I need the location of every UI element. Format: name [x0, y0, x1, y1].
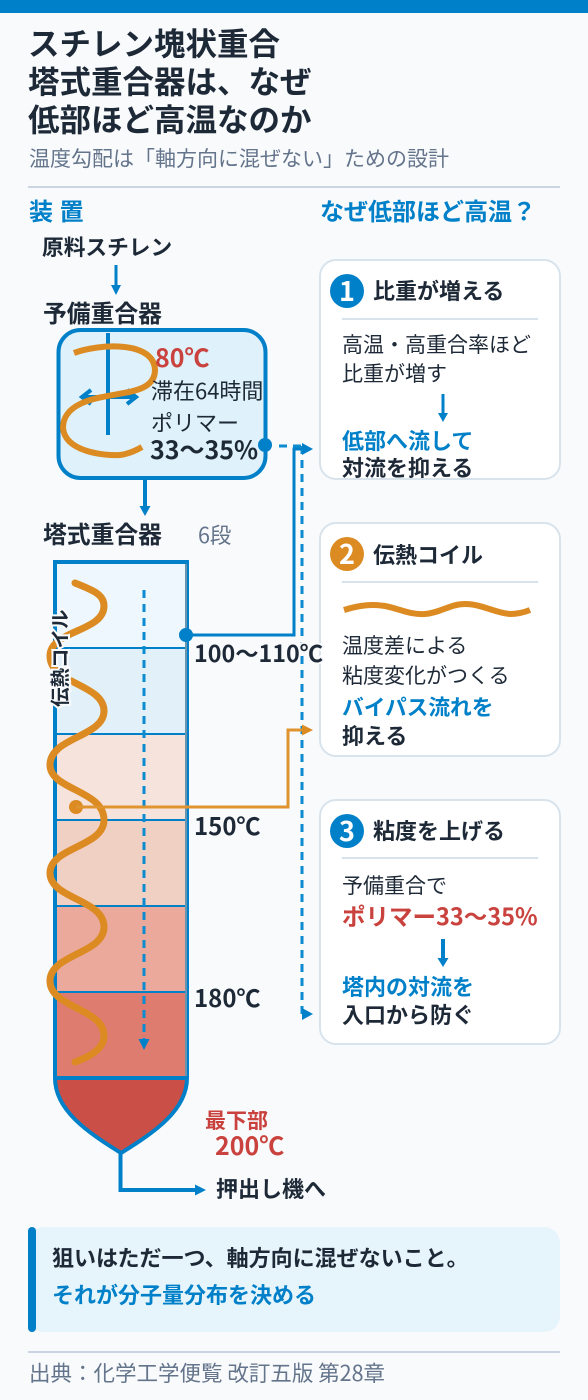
callout line 2: それが分子量分布を決める: [52, 1283, 316, 1308]
badge 1: 1: [339, 270, 355, 309]
card 2 coil icon: [344, 604, 530, 614]
outlet label: 押出し機へ: [216, 1177, 326, 1202]
card 3 value: ポリマー33〜35%: [342, 898, 538, 932]
card 2 conclusion: 抑える: [342, 724, 407, 749]
arrow: to tower: [140, 480, 150, 516]
tower: [50, 562, 193, 1153]
card 2: [320, 523, 560, 756]
temperature: 80℃: [155, 339, 210, 375]
connector: coil to reason 2: [76, 724, 313, 807]
label: six stages: 6段: [198, 519, 231, 550]
title: 塔式重合器は、なぜ: [28, 64, 312, 100]
connector: dashed flow to reason 1: [186, 438, 313, 1020]
heading: why hotter: なぜ低部ほど高温？: [320, 199, 536, 226]
top bar: [0, 0, 588, 13]
callout line 1: 狙いはただ一つ、軸方向に混ぜないこと。: [52, 1246, 469, 1271]
card 2 heading: 伝熱コイル: [373, 543, 483, 568]
card 1: [320, 260, 560, 481]
badge 2: [330, 533, 364, 572]
badge 1: [330, 270, 364, 309]
card 3 arrow: [438, 939, 448, 967]
card 3 conclusion: [342, 975, 474, 1028]
bottom temperature: 最下部: [205, 1110, 268, 1133]
label: raw styrene: 原料スチレン: [42, 235, 172, 260]
card 2 body: [342, 635, 510, 688]
bottom temperature: 200℃: [215, 1127, 284, 1163]
temperature label middle: 150℃: [194, 807, 260, 842]
card 3 conclusion: 入口から防ぐ: [342, 1003, 474, 1028]
outlet arrowhead: [195, 1184, 206, 1196]
circulation arrows: [82, 390, 136, 404]
stages: [55, 562, 187, 1078]
residence time: 滞在64時間: [151, 374, 263, 406]
outlet pipe: [120, 1153, 197, 1190]
bottom temperature: [205, 1110, 284, 1163]
card 2 body: 粘度変化がつくる: [342, 665, 510, 688]
label: prepolymerizer: 予備重合器: [43, 301, 162, 328]
tower tap point: [179, 628, 193, 642]
coil tap point: [69, 800, 83, 814]
polymer value: 33〜35%: [150, 431, 258, 467]
card 3 conclusion: 塔内の対流を: [342, 975, 474, 1000]
card 3 heading: 粘度を上げる: [373, 819, 505, 844]
label: tower reactor: 塔式重合器: [43, 522, 162, 549]
card 1 body: 比重が増す: [342, 363, 447, 386]
subtitle: 温度勾配は「軸方向に混ぜない」ための設計: [29, 148, 449, 171]
source: 出典：化学工学便覧 改訂五版 第28章: [29, 1357, 385, 1388]
card 1 arrow: [438, 394, 448, 422]
callout: [28, 1227, 560, 1332]
bottom head: [55, 1078, 187, 1153]
card 1 conclusion: 低部へ流して: [342, 429, 473, 454]
coil label: 伝熱コイル: [50, 609, 72, 707]
heat transfer coil: [50, 583, 104, 1062]
polymer label: ポリマー: [151, 411, 239, 436]
temperature label lower: 180℃: [194, 979, 260, 1014]
card 2 body: 温度差による: [342, 635, 467, 658]
title: 低部ほど高温なのか: [28, 102, 312, 138]
card 1 heading: 比重が増える: [373, 279, 504, 304]
badge 2: 2: [339, 533, 355, 572]
card 1 body: [342, 334, 531, 386]
temperature label top: 100〜110℃: [194, 635, 323, 669]
coil: [63, 346, 155, 455]
arrow: feed: [111, 265, 121, 295]
title: スチレン塊状重合: [28, 26, 280, 62]
title: [28, 26, 312, 138]
panel: prepolymerizer vessel: [58, 330, 266, 478]
card 2 conclusion: [342, 695, 493, 749]
card 1 conclusion: [342, 429, 473, 481]
card 3 body: 予備重合で: [342, 875, 447, 898]
card 1 conclusion: 対流を抑える: [342, 456, 473, 481]
card 3: [320, 800, 560, 1044]
card 1 body: 高温・高重合率ほど: [342, 334, 531, 357]
agitator shaft: [106, 333, 110, 435]
heading: apparatus: 装 置: [29, 199, 84, 226]
card 2 conclusion: バイパス流れを: [342, 695, 493, 720]
tower wall: [55, 562, 187, 1153]
badge 3: 3: [339, 810, 355, 849]
flow arrow: [138, 590, 150, 1050]
badge 3: [330, 810, 364, 849]
